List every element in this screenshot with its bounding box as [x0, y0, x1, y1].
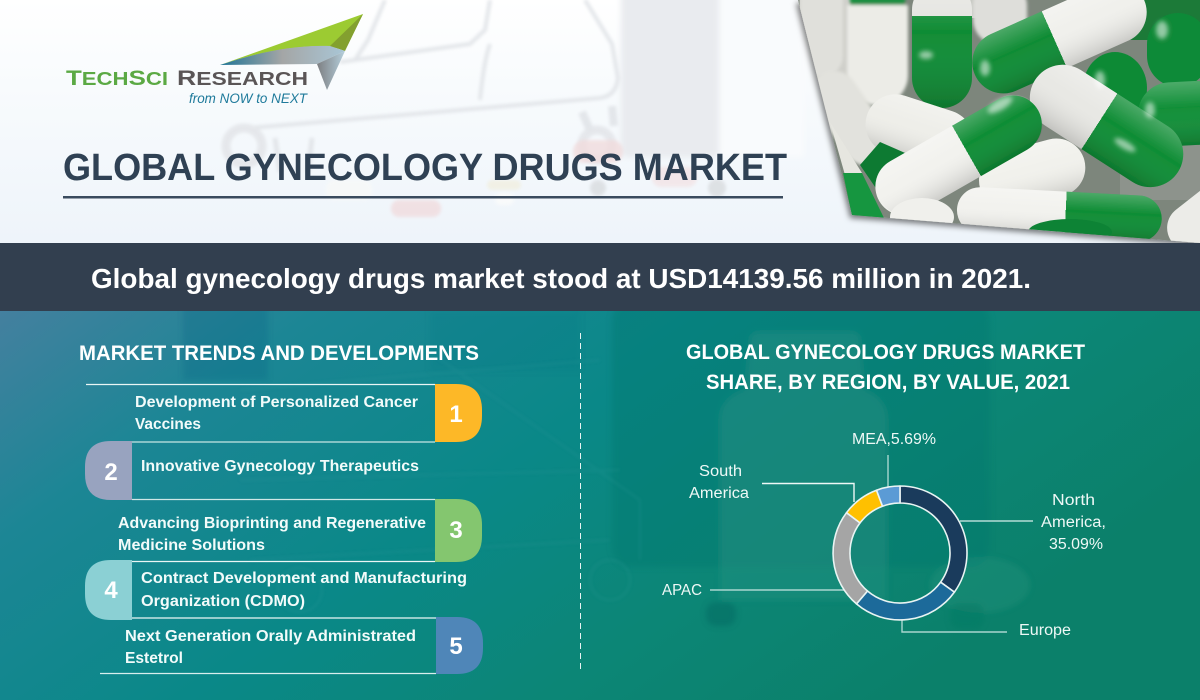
panel: header background [0, 0, 1200, 244]
badge 5 [436, 617, 483, 674]
logo wordmark: RESEARCH [177, 67, 308, 90]
panel: lower background [0, 300, 1200, 700]
title: GLOBAL GYNECOLOGY DRUGS MARKET [63, 147, 787, 189]
text 1: Development of Personalized Cancer [135, 394, 418, 411]
logo tagline: from NOW to NEXT [189, 91, 309, 106]
text 1: Vaccines [135, 416, 201, 433]
chart labels: MEA,5.69% [852, 431, 936, 448]
leader lines [710, 455, 1033, 632]
logo wordmark [66, 67, 308, 90]
text 2: Innovative Gynecology Therapeutics [141, 458, 419, 475]
background: faint bottles and cart [183, 300, 1030, 629]
photo: green and white capsules [790, 0, 1200, 260]
heading: market share: SHARE, BY REGION, BY VALUE, 2021 [706, 370, 1070, 394]
heading: market trends: MARKET TRENDS AND DEVELOPMENTS [79, 341, 479, 365]
text 5: Next Generation Orally Administrated [125, 628, 416, 645]
text 4: Organization (CDMO) [141, 593, 305, 610]
chart labels [662, 431, 1106, 639]
text 3: Advancing Bioprinting and Regenerative [118, 515, 426, 532]
text 5: Estetrol [125, 650, 183, 667]
trend 3 [118, 499, 482, 562]
divider [580, 333, 582, 669]
chart labels: Europe [1019, 622, 1071, 639]
trend 1 [86, 384, 482, 442]
trend 2 [85, 441, 435, 500]
donut chart [833, 486, 967, 620]
banner text: Global gynecology drugs market stood at USD14139.56 million in 2021. [91, 263, 1031, 294]
chart labels: APAC [662, 582, 702, 599]
heading: market share: GLOBAL GYNECOLOGY DRUGS MARKET [686, 340, 1085, 364]
text 4: Contract Development and Manufacturing [141, 570, 467, 587]
badge 2: 2 [104, 459, 118, 486]
badge 1 [435, 384, 482, 442]
panel: market trends [79, 341, 483, 674]
logo wordmark: TECH SCI [66, 67, 168, 90]
badge 3 [435, 499, 482, 562]
trend 4 [85, 560, 467, 620]
chart labels: North [1052, 492, 1095, 509]
badge 5: 5 [449, 633, 463, 660]
chart labels: America [689, 485, 749, 502]
text 3: Medicine Solutions [118, 537, 265, 554]
badge 2 [85, 441, 132, 500]
badge 3: 3 [449, 517, 463, 544]
badge 4 [85, 560, 132, 620]
background: faint bottle [621, 0, 804, 157]
badge 4: 4 [104, 577, 118, 604]
background: faint shopping cart [226, 0, 618, 172]
capsule highlights [919, 21, 1168, 154]
chart labels: South [699, 463, 742, 480]
badge 1: 1 [449, 401, 463, 428]
trend 5 [100, 617, 483, 674]
background: faint scattered pills [326, 140, 726, 217]
panel: market share chart [662, 340, 1106, 639]
banner [0, 243, 1200, 311]
logo mark [220, 14, 363, 90]
chart labels: 35.09% [1049, 536, 1103, 553]
logo [66, 14, 363, 106]
chart labels: America, [1041, 514, 1106, 531]
